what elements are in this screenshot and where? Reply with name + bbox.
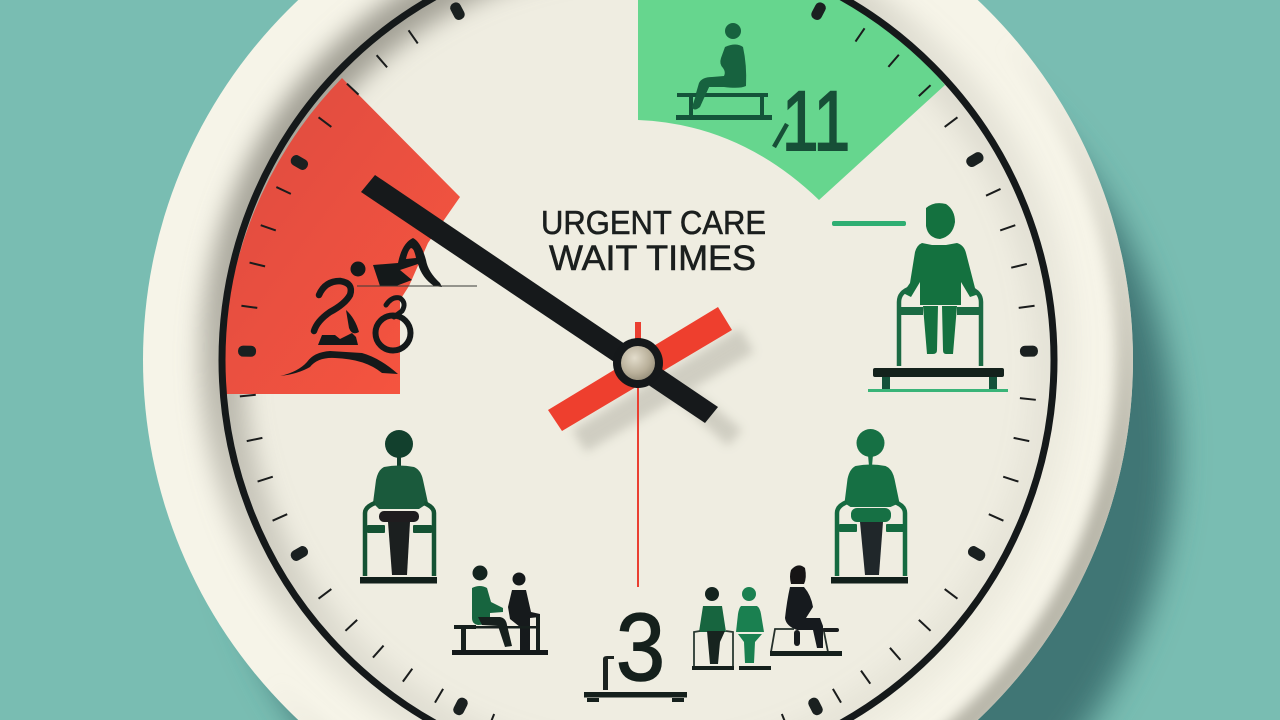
black minute hand xyxy=(361,175,718,423)
clock body xyxy=(143,0,1133,720)
red hour hand xyxy=(548,307,732,431)
title: URGENT CARE xyxy=(541,204,766,241)
green wait-time zone xyxy=(638,0,945,200)
icon: figure in red zone xyxy=(280,238,477,376)
icon: green dash marker xyxy=(832,221,906,226)
title: WAIT TIMES xyxy=(549,239,756,278)
icon: seated person with walker, left xyxy=(360,430,437,584)
clock hands xyxy=(361,175,754,587)
minute and hour tick marks xyxy=(238,0,1038,720)
black clock ring xyxy=(222,0,1054,720)
icon: seated person on bench in green zone xyxy=(676,23,772,120)
title xyxy=(541,204,766,278)
icon: standing person with walker xyxy=(868,203,1008,392)
red wait-time zone xyxy=(223,78,460,394)
thin red second hand xyxy=(635,322,641,587)
outer rim xyxy=(143,0,1133,720)
centre hub xyxy=(613,338,663,388)
clock face xyxy=(222,0,1054,720)
label: 3 with stand xyxy=(584,594,687,702)
label: 3 with stand: 3 xyxy=(616,594,665,701)
hand shadows xyxy=(572,328,754,452)
icon: seated person with walker, right xyxy=(831,429,908,584)
label: 11: 11 xyxy=(782,74,850,168)
clock drop shadow xyxy=(215,0,1175,720)
icon: two people on bench xyxy=(452,566,548,655)
icon: three seated people xyxy=(692,565,842,670)
